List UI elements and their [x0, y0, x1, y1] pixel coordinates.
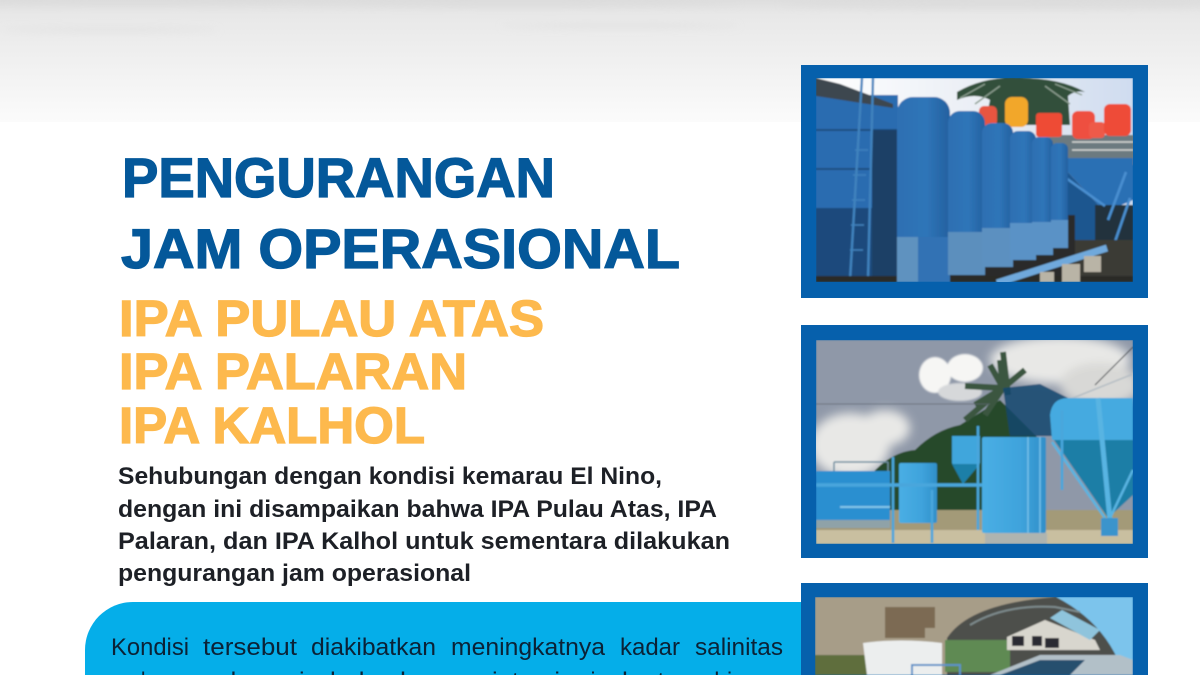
panel text: cause of reduction: Kondisi: [111, 634, 189, 661]
photo frame 3: water treatment basin under dome: [801, 583, 1148, 675]
title: Pengurangan Jam Operasional: JAM OPERASIONAL: [121, 217, 680, 280]
title: Pengurangan Jam Operasional: [121, 146, 680, 280]
text block: announcement: dengan ini disampaikan bahwa IPA Pulau Atas, IPA: [118, 496, 717, 523]
subtitle: IPA names: IPA KALHOL: [119, 397, 425, 454]
photo frame 2: light blue clarifier tanks: [801, 325, 1148, 558]
panel text: cause of reduction: [111, 634, 783, 675]
photo frame 1: blue filter tanks: [801, 65, 1148, 298]
text block: announcement: Sehubungan dengan kondisi kemarau El Nino,: [118, 463, 662, 490]
panel text: cause of reduction: kadar: [620, 634, 680, 661]
panel text: cause of reduction: meningkatnya: [451, 634, 605, 661]
text block: announcement: pengurangan jam operasional: [118, 560, 471, 587]
text block: announcement: Palaran, dan IPA Kalhol untuk sementara dilakukan: [118, 528, 730, 555]
panel text: cause of reduction: salinitas: [695, 634, 783, 661]
panel: blue explanation: [85, 602, 830, 675]
title: Pengurangan Jam Operasional: PENGURANGAN: [122, 146, 555, 209]
panel text: cause of reduction: diakibatkan: [311, 634, 436, 661]
subtitle: IPA names: IPA PULAU ATAS: [119, 290, 544, 347]
subtitle: IPA names: [119, 290, 544, 454]
panel text: cause of reduction: tersebut: [203, 634, 297, 661]
background: grey sky band: [0, 0, 1200, 122]
subtitle: IPA names: IPA PALARAN: [119, 343, 467, 400]
text block: announcement: [118, 463, 730, 587]
